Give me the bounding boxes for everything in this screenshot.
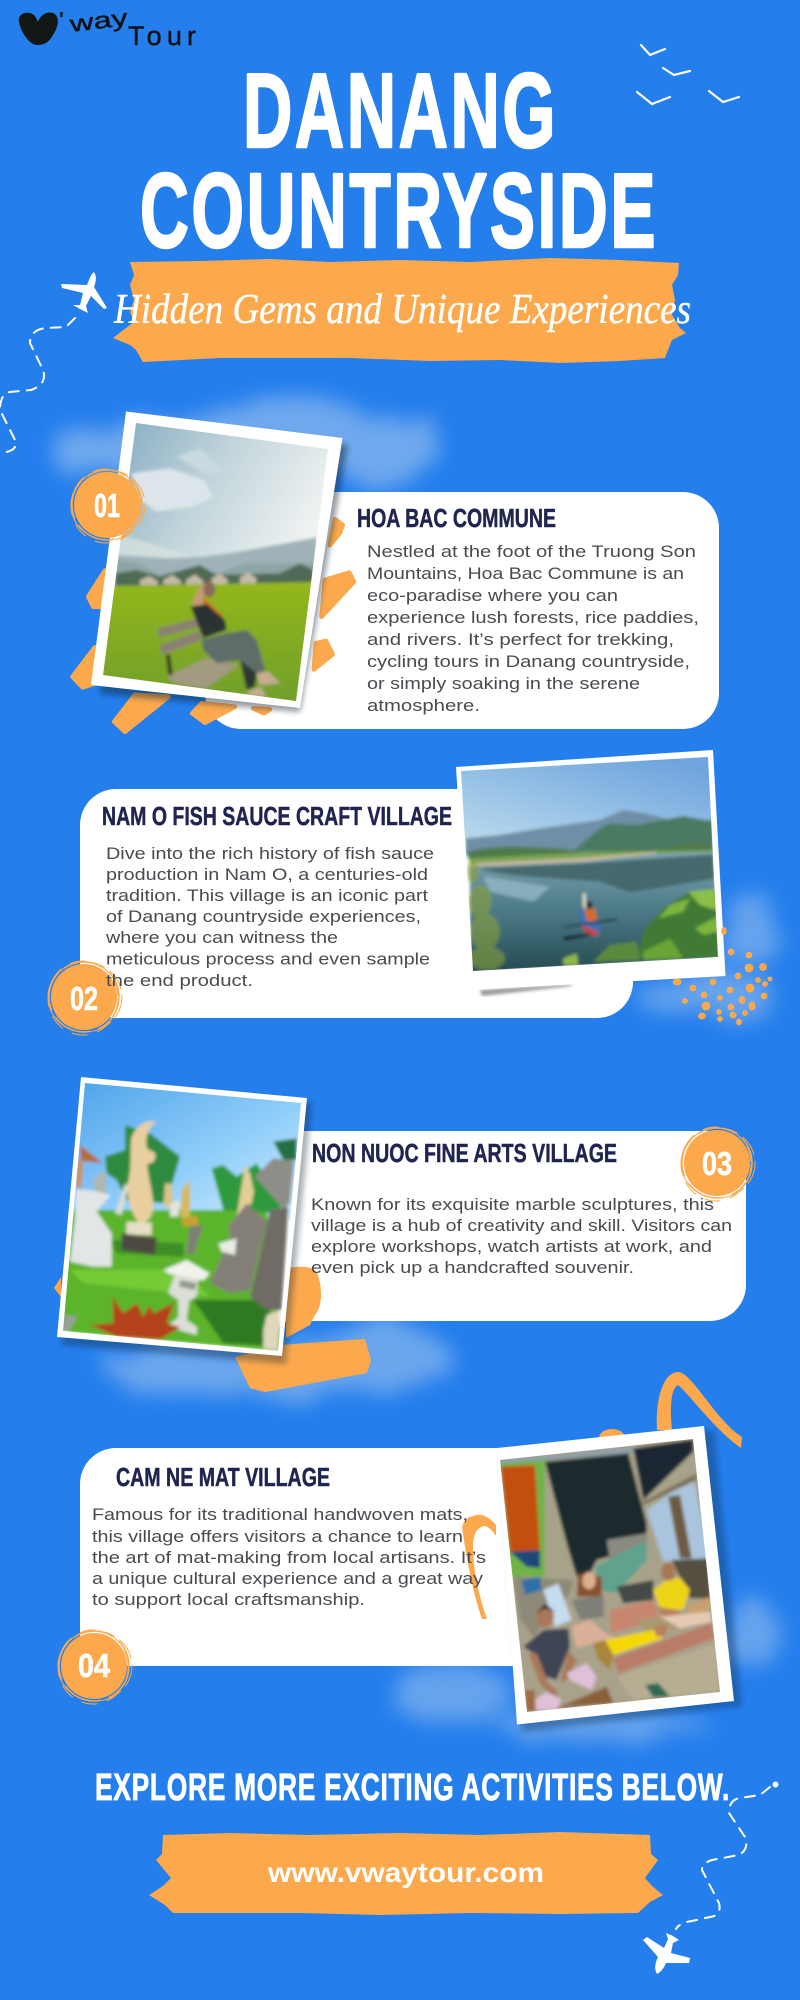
body text: production in Nam O, a centuries-old <box>106 866 428 884</box>
body text: even pick up a handcrafted souvenir. <box>311 1259 634 1277</box>
body text: meticulous process and even sample <box>106 950 430 968</box>
brush strokes <box>73 519 354 732</box>
panel: Non Nuoc Fine Arts Village <box>54 1077 755 1392</box>
body text: a unique cultural experience and a great way <box>92 1570 484 1588</box>
subtitle banner <box>113 258 691 363</box>
photo <box>497 1426 742 1732</box>
card <box>80 789 633 1018</box>
body text: eco-paradise where you can <box>367 587 618 605</box>
clouds behind panel 4 <box>390 1597 780 1739</box>
body text: this village offers visitors a chance to learn <box>92 1528 463 1546</box>
photo <box>456 750 726 996</box>
website banner: www.vwaytour.com <box>267 1857 544 1888</box>
body text: Known for its exquisite marble sculptures, this <box>311 1196 714 1214</box>
heading: NON NUOC FINE ARTS VILLAGE <box>312 1138 617 1168</box>
crescent brush <box>462 1515 496 1619</box>
body text: and rivers. It’s perfect for trekking, <box>367 631 674 649</box>
title: DANANG <box>243 52 558 170</box>
panel: Hoa Bac Commune <box>71 412 719 732</box>
subtitle banner: Hidden Gems and Unique Experiences <box>113 287 691 333</box>
panel: Nam O Fish Sauce Craft Village <box>48 750 772 1035</box>
logo: Tour <box>128 21 196 51</box>
logo <box>19 4 196 51</box>
number badge: 03 <box>702 1145 732 1182</box>
body text: where you can witness the <box>105 929 338 947</box>
body text: Dive into the rich history of fish sauce <box>106 845 434 863</box>
title <box>140 52 658 270</box>
card <box>230 1131 746 1321</box>
body text: experience lush forests, rice paddies, <box>367 609 699 627</box>
dashed flight path bottom <box>676 1782 778 1929</box>
photo <box>57 1077 312 1364</box>
number badge <box>71 469 145 543</box>
body text: of Danang countryside experiences, <box>106 908 421 926</box>
body text: explore workshops, watch artists at work, and <box>311 1238 712 1256</box>
logo: way <box>67 4 130 37</box>
body text <box>105 845 434 990</box>
brush strokes <box>54 1267 371 1392</box>
body text: to support local craftsmanship. <box>92 1591 365 1609</box>
body text: the art of mat-making from local artisans. It’s <box>92 1549 486 1567</box>
body text: Nestled at the foot of the Truong Son <box>367 543 696 561</box>
website banner <box>149 1832 663 1915</box>
body text: Mountains, Hoa Bac Commune is an <box>367 565 684 583</box>
logo: ' <box>59 9 64 31</box>
number badge <box>48 961 122 1035</box>
number badge: 01 <box>94 487 120 524</box>
body text: village is a hub of creativity and skill. Visitors can <box>311 1217 732 1235</box>
body text: cycling tours in Danang countryside, <box>367 653 690 671</box>
body text <box>92 1506 486 1609</box>
icon: airplane bottom <box>643 1933 690 1974</box>
body text: tradition. This village is an iconic part <box>106 887 428 905</box>
card <box>80 1448 540 1666</box>
icon: airplane top <box>61 272 107 313</box>
orange arc <box>657 1372 742 1448</box>
body text <box>311 1196 732 1277</box>
number badge: 02 <box>70 980 98 1017</box>
photo <box>91 412 348 712</box>
clouds behind panel 1 <box>55 395 440 488</box>
body text: the end product. <box>106 972 253 990</box>
orange hump <box>599 1429 625 1447</box>
orange dots <box>673 928 772 1025</box>
number badge: 04 <box>78 1647 111 1684</box>
icon: birds <box>637 45 739 104</box>
clouds behind panel 3 <box>100 1320 450 1400</box>
body text: atmosphere. <box>367 697 480 715</box>
clouds behind panel 2 <box>635 894 780 1017</box>
body text: or simply soaking in the serene <box>367 675 640 693</box>
body text: Famous for its traditional handwoven mats, <box>92 1506 468 1524</box>
heading: HOA BAC COMMUNE <box>357 503 556 533</box>
number badge <box>681 1127 755 1201</box>
number badge <box>58 1630 132 1704</box>
body text <box>367 543 699 715</box>
card <box>205 492 719 729</box>
panel: Cam Ne Mat Village <box>58 1372 742 1732</box>
heading: CAM NE MAT VILLAGE <box>116 1462 330 1492</box>
dashed flight path top <box>0 318 75 453</box>
heading: NAM O FISH SAUCE CRAFT VILLAGE <box>102 801 452 831</box>
